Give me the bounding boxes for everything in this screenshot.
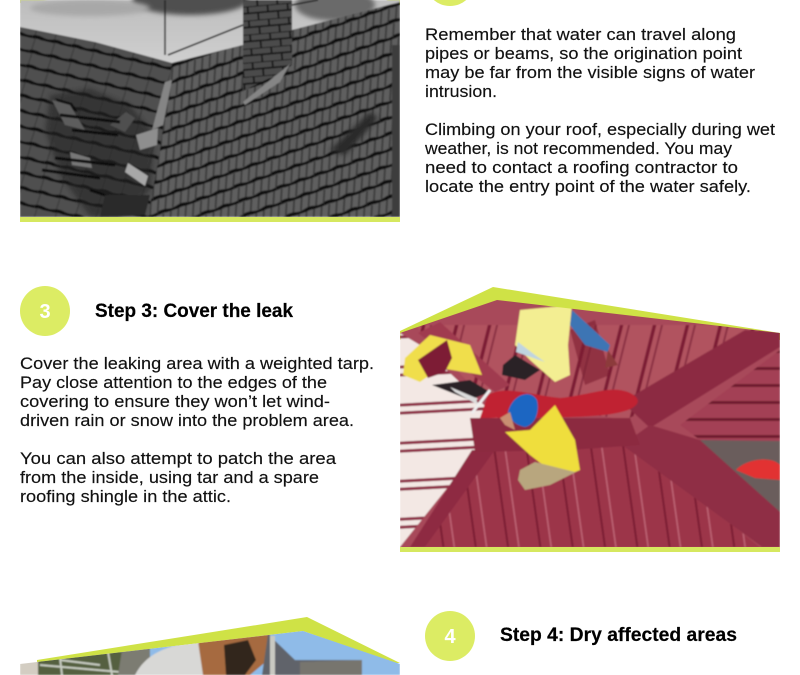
text block: finding the water origin	[424, 25, 775, 196]
step 3 number badge: 3	[39, 301, 51, 323]
text block: finding the water origin: weather, is not recommended. You may	[424, 139, 733, 158]
top step circle	[425, 0, 475, 6]
text block: step 3 instructions: covering to ensure they won’t let wind-	[20, 392, 330, 411]
photo: damaged tiled roof	[20, 0, 400, 222]
text block: finding the water origin: locate the entry point of the water safely.	[425, 177, 751, 196]
text block: step 3 instructions: Cover the leaking area with a weighted tarp.	[20, 354, 374, 373]
text block: step 3 instructions: You can also attempt to patch the area	[20, 449, 337, 468]
text block: step 3 instructions	[20, 354, 374, 506]
photo: workers patching red metal roof	[400, 287, 780, 552]
step 4 number badge	[425, 611, 475, 661]
step 4 number badge: 4	[444, 626, 456, 648]
photo: man drying affected area	[20, 617, 400, 675]
step 3 number badge	[20, 286, 70, 336]
text block: finding the water origin: may be far from the visible signs of water	[425, 63, 755, 82]
step 4 heading: Step 4: Dry affected areas	[500, 625, 737, 646]
text block: finding the water origin: intrusion.	[425, 82, 497, 101]
step 3 heading: Step 3: Cover the leak	[95, 301, 293, 322]
text block: finding the water origin: Climbing on your roof, especially during wet	[425, 120, 775, 139]
text block: step 3 instructions: driven rain or snow into the problem area.	[20, 411, 354, 430]
text block: finding the water origin: pipes or beams, so the origination point	[425, 44, 742, 63]
text block: step 3 instructions: roofing shingle in the attic.	[20, 487, 231, 506]
text block: finding the water origin: Remember that water can travel along	[425, 25, 736, 44]
text block: step 3 instructions: from the inside, using tar and a spare	[20, 468, 319, 487]
text block: step 3 instructions: Pay close attention to the edges of the	[20, 373, 327, 392]
text block: finding the water origin: need to contact a roofing contractor to	[425, 158, 738, 177]
